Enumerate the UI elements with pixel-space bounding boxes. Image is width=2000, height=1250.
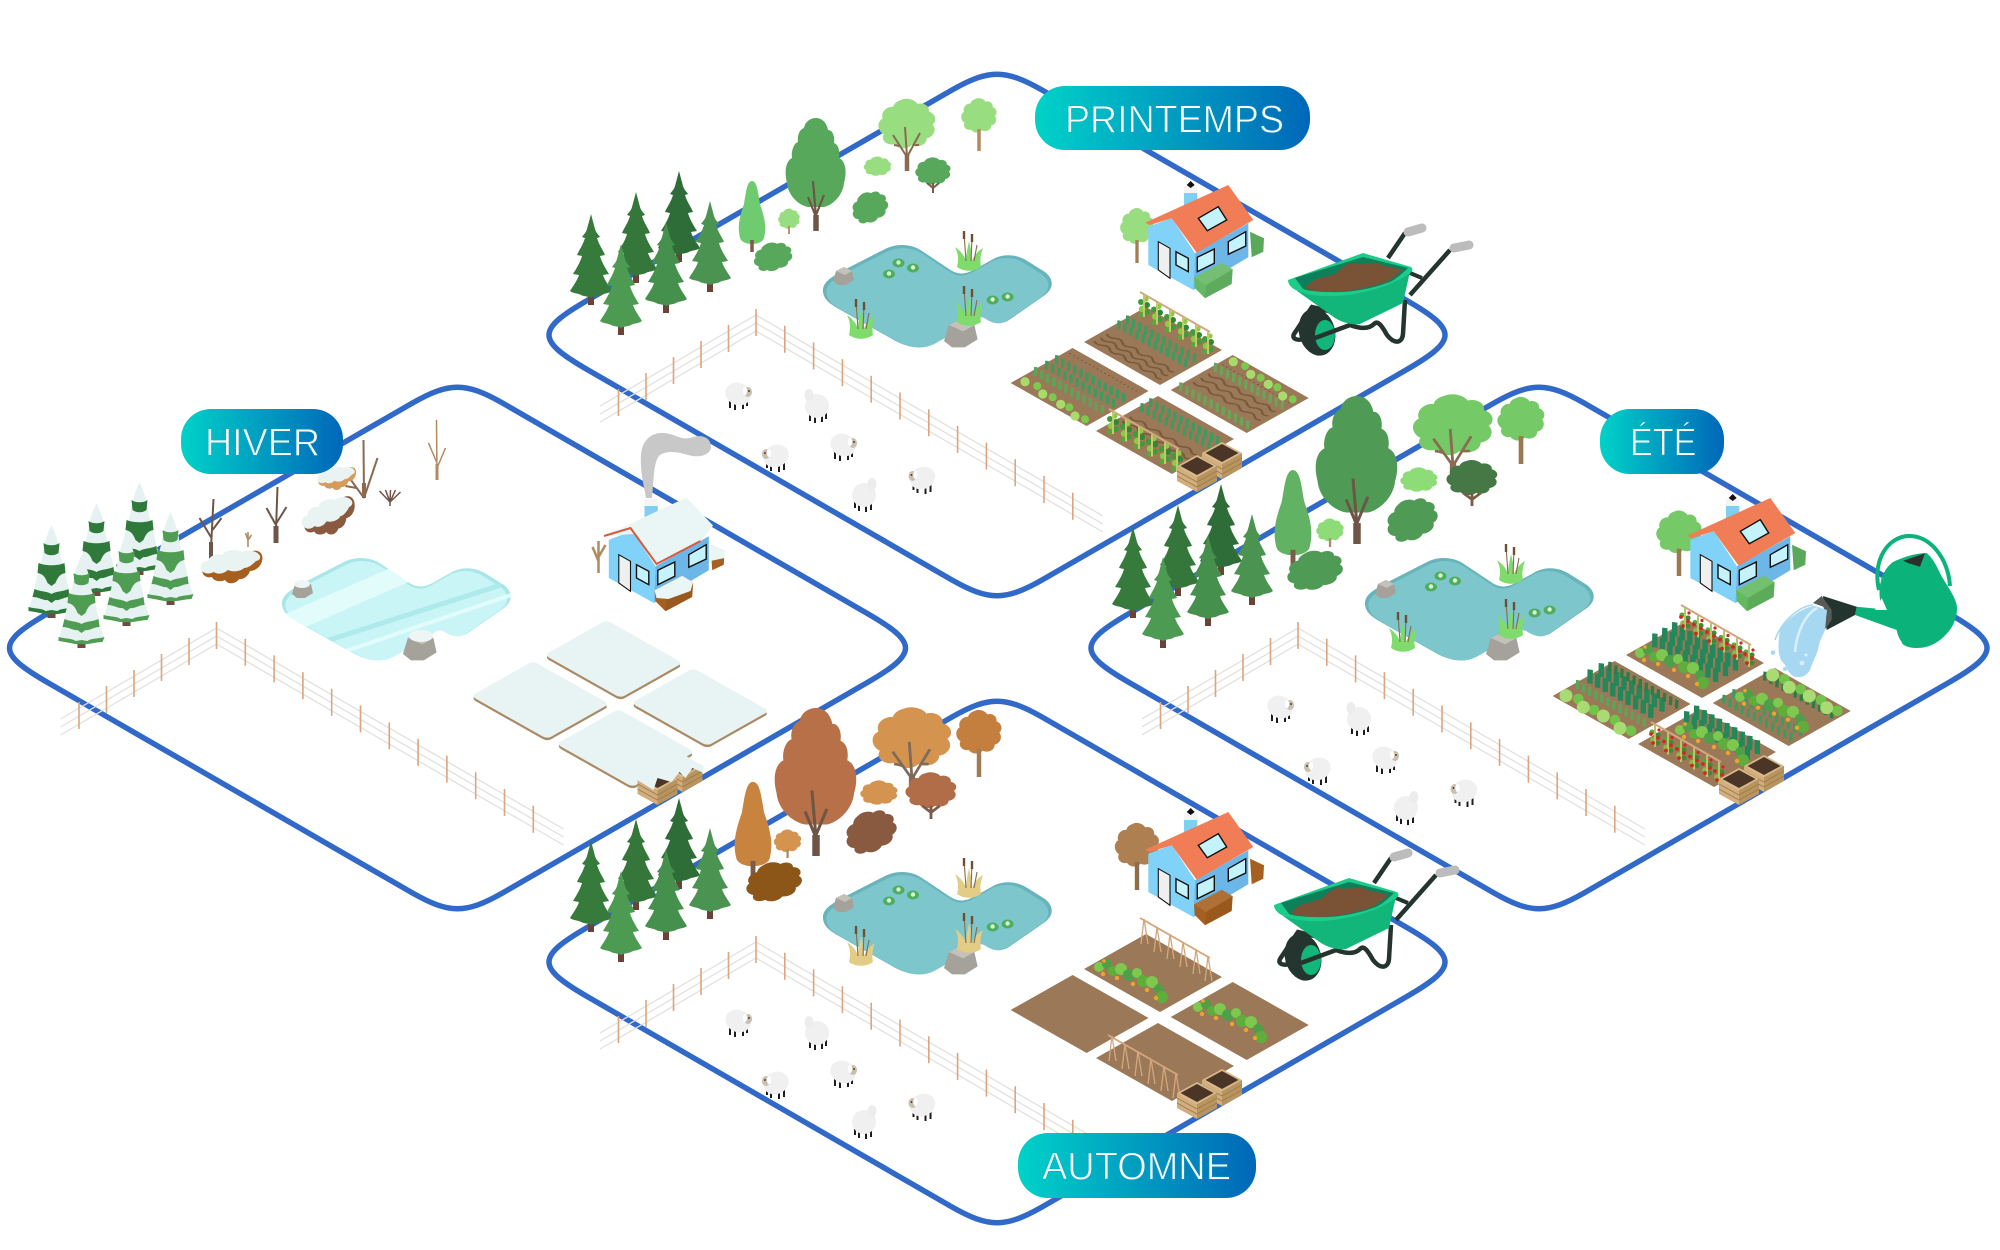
house <box>1656 494 1806 611</box>
label: HIVER: HIVER <box>205 422 320 464</box>
label: ÉTÉ <box>1600 409 1724 474</box>
pond <box>1365 544 1594 660</box>
snowy bushes <box>201 467 360 583</box>
wheelbarrow <box>1288 228 1469 360</box>
snowy firs <box>28 482 194 648</box>
trees and bushes <box>1275 394 1544 595</box>
wheelbarrow <box>1274 853 1455 985</box>
panel outline: hiver <box>10 387 906 909</box>
label: HIVER <box>181 409 343 474</box>
firs <box>1112 484 1273 648</box>
label: PRINTEMPS: PRINTEMPS <box>1065 98 1284 142</box>
label: PRINTEMPS <box>1035 86 1310 150</box>
vegetable plots <box>1011 918 1309 1119</box>
panel: printemps scene <box>570 98 1469 532</box>
firs <box>570 171 731 335</box>
panel: été scene <box>1112 394 1851 845</box>
sheep <box>722 1006 939 1139</box>
panel outline: été <box>1091 387 1987 909</box>
trees and bushes <box>739 98 997 275</box>
fence <box>1142 622 1645 845</box>
vegetable plots <box>1548 605 1851 805</box>
fence <box>60 622 564 845</box>
snow-covered garden plots <box>471 620 769 805</box>
label: AUTOMNE: AUTOMNE <box>1042 1146 1231 1188</box>
firs <box>570 798 731 962</box>
smoke <box>641 433 711 498</box>
snow-covered house <box>592 498 724 611</box>
label: ÉTÉ: ÉTÉ <box>1630 422 1696 464</box>
panel: automne scene <box>570 707 1455 1159</box>
pond <box>823 858 1052 974</box>
panel outline: printemps <box>549 74 1445 596</box>
panel: hiver scene <box>28 420 769 845</box>
watering can <box>1813 536 1957 648</box>
label: AUTOMNE <box>1018 1133 1256 1198</box>
house <box>1120 181 1264 298</box>
bare trees <box>200 420 446 562</box>
fence <box>600 936 1103 1159</box>
water stream <box>1771 605 1827 677</box>
trees and bushes <box>735 707 1001 907</box>
frozen pond <box>276 558 511 660</box>
fence <box>600 309 1103 532</box>
vegetable plots <box>1009 292 1309 492</box>
pond <box>823 231 1052 347</box>
house <box>1115 808 1264 925</box>
sheep <box>722 379 939 512</box>
sheep <box>1264 692 1481 825</box>
panel outline: automne <box>549 701 1445 1223</box>
